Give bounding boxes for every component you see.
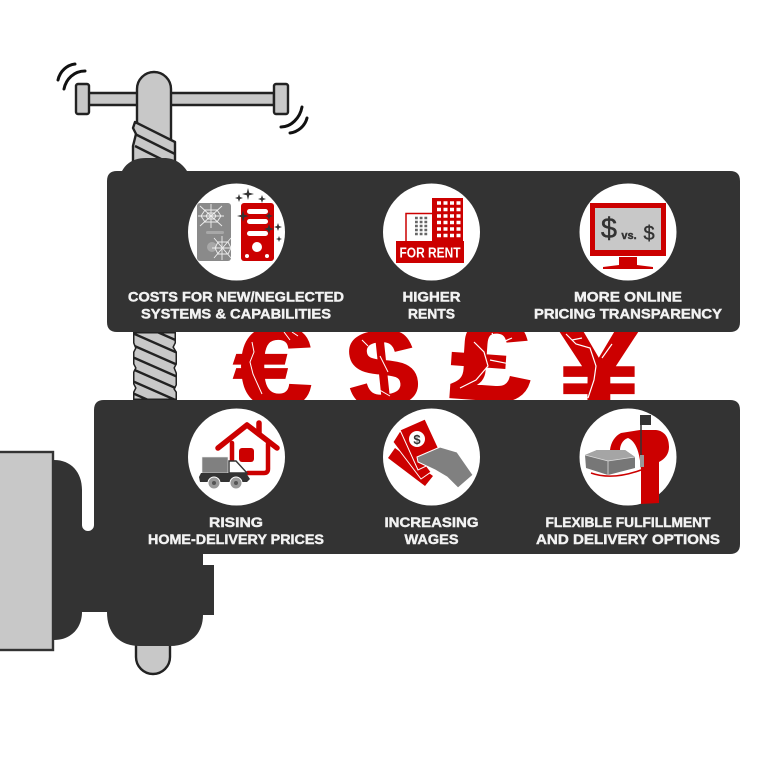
upper thread <box>133 122 175 165</box>
top panel <box>107 158 740 332</box>
label: fulfillment <box>536 514 720 547</box>
euro symbol <box>232 332 312 400</box>
grey building <box>406 214 433 242</box>
price text: $ <box>643 223 655 245</box>
middle screw thread <box>133 332 177 400</box>
pound symbol: £ <box>448 295 535 426</box>
label: wages: INCREASING <box>384 514 479 530</box>
label: fulfillment: AND DELIVERY OPTIONS <box>536 531 720 547</box>
left end cap <box>76 84 89 114</box>
screw head <box>137 72 171 142</box>
price text <box>601 213 655 245</box>
motion marks <box>58 64 307 133</box>
mailbox body <box>610 430 669 504</box>
yen symbol <box>560 332 638 400</box>
parcel <box>585 450 635 475</box>
lower screw stub <box>136 640 170 674</box>
euro symbol: € <box>234 304 312 431</box>
label: delivery prices: RISING <box>209 514 263 530</box>
fanned bills <box>388 448 433 486</box>
house <box>218 423 277 473</box>
label: costs <box>128 288 344 322</box>
icon: monitor price comparison <box>580 184 676 280</box>
currency symbols <box>232 332 638 400</box>
right end cap <box>274 84 288 114</box>
label: pricing transparency: PRICING TRANSPARENCY <box>534 306 723 322</box>
new server <box>241 203 274 261</box>
label: fulfillment: FLEXIBLE FULFILLMENT <box>546 514 711 530</box>
swoosh <box>591 470 641 476</box>
sparkles <box>235 188 282 242</box>
icon: wages <box>383 408 480 506</box>
label: delivery prices: HOME-DELIVERY PRICES <box>148 531 324 547</box>
label: delivery prices <box>148 514 324 547</box>
banner <box>396 241 464 263</box>
screw: T-handle <box>58 64 307 165</box>
hand <box>417 447 473 488</box>
dollar symbol: $ <box>341 303 424 436</box>
handle bar <box>88 93 274 105</box>
yen symbol: ¥ <box>558 304 640 431</box>
vise lower body <box>54 400 740 646</box>
icon: for rent buildings <box>383 184 480 280</box>
price text: vs. <box>621 230 637 242</box>
label: higher rents <box>402 288 460 322</box>
banner text: FOR RENT <box>400 244 460 262</box>
icon: home delivery <box>188 408 285 506</box>
label: wages <box>384 514 479 547</box>
label: higher rents: HIGHER <box>402 288 460 304</box>
label: costs: COSTS FOR NEW/NEGLECTED <box>128 288 344 304</box>
red building <box>432 198 463 242</box>
label: pricing transparency <box>534 288 723 322</box>
label: pricing transparency: MORE ONLINE <box>574 288 682 304</box>
flag <box>640 415 642 457</box>
icon: wages: $ <box>413 432 421 447</box>
icon: mailbox <box>580 408 676 506</box>
icon: systems <box>188 184 285 280</box>
truck <box>199 457 250 489</box>
coin <box>409 431 425 447</box>
vise fixed jaw block <box>0 452 53 650</box>
label: wages: WAGES <box>404 531 458 547</box>
neglected server <box>197 203 231 261</box>
dollar symbol <box>349 332 418 400</box>
pound symbol <box>449 332 530 400</box>
label: higher rents: RENTS <box>408 306 455 322</box>
price text: $ <box>601 213 617 245</box>
label: costs: SYSTEMS & CAPABILITIES <box>141 306 331 322</box>
